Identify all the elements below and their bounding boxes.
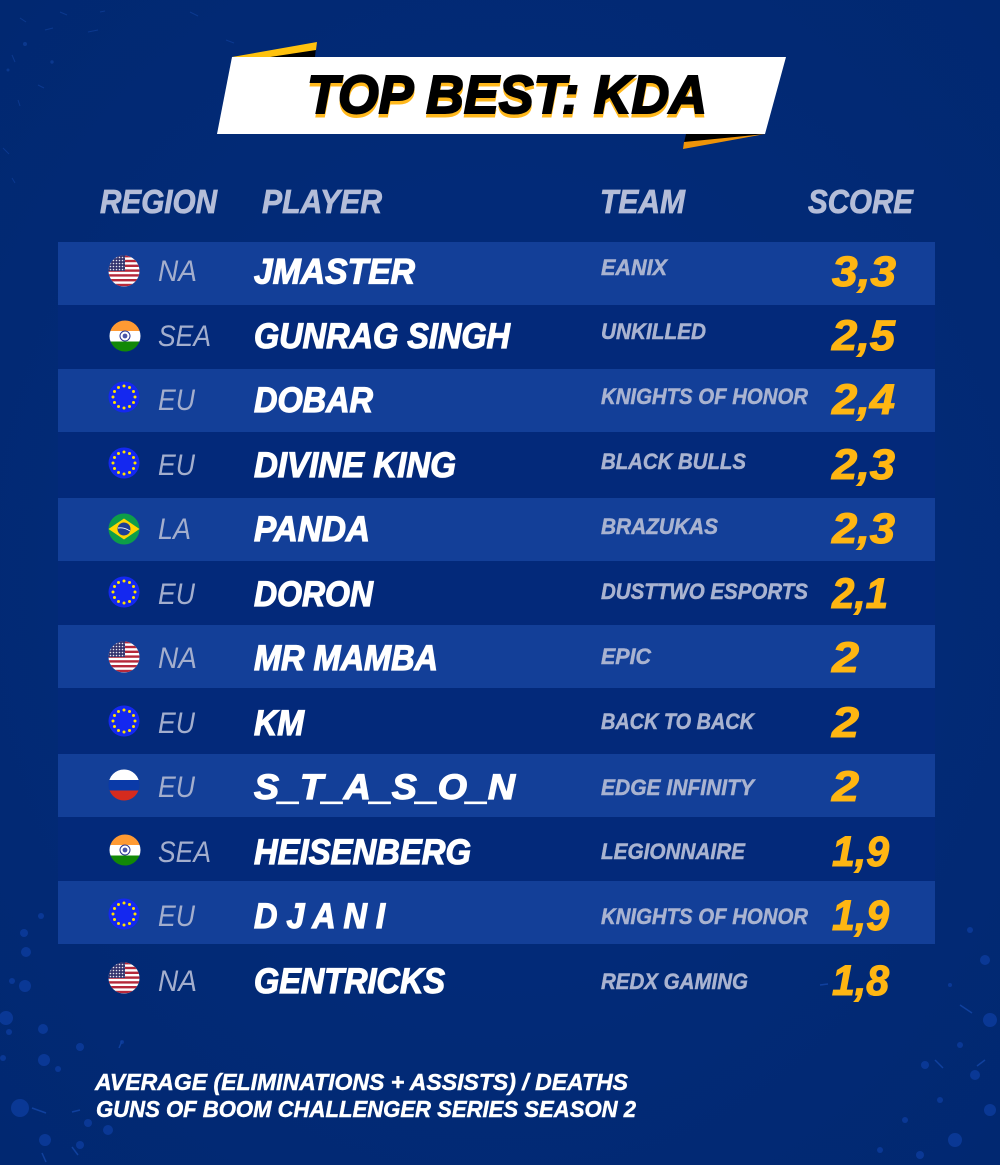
row 4: EU xyxy=(158,449,195,482)
column headers xyxy=(100,183,914,220)
footnote line 2: GUNS OF BOOM CHALLENGER SERIES SEASON 2 xyxy=(96,1096,636,1122)
row 9: EDGE INFINITY xyxy=(601,775,756,800)
row 10: LEGIONNAIRE xyxy=(601,839,746,864)
row 3: EU xyxy=(158,384,195,417)
row 2: UNKILLED xyxy=(601,319,706,344)
title shadow: TOP BEST: KDA xyxy=(307,68,707,128)
row 9: EU xyxy=(158,771,195,804)
background particles: top left xyxy=(3,11,234,183)
header: score: SCORE xyxy=(808,183,914,220)
row 5 xyxy=(58,498,935,561)
row 11: D J A N I xyxy=(254,897,386,936)
row 1: 3,3 xyxy=(832,248,896,296)
footnote line 1: AVERAGE (ELIMINATIONS + ASSISTS) / DEATHS xyxy=(94,1069,629,1095)
flag: EU xyxy=(108,448,140,478)
row 5: 2,3 xyxy=(831,505,895,553)
row 9 xyxy=(58,754,935,817)
flag: EU xyxy=(108,898,140,930)
flag: USA xyxy=(108,641,140,673)
row 3: DOBAR xyxy=(254,381,374,420)
row 6: DUSTTWO ESPORTS xyxy=(601,579,808,604)
row 7 xyxy=(58,625,935,688)
row 8 xyxy=(58,688,935,754)
background particles: bottom left xyxy=(0,913,124,1162)
flag: Russia xyxy=(108,769,140,802)
row 8: BACK TO BACK xyxy=(601,709,756,734)
row 6 xyxy=(58,561,935,625)
row 3 xyxy=(58,369,935,432)
row 2 xyxy=(58,305,935,369)
row 9: S_T_A_S_O_N xyxy=(254,768,516,807)
row 12: 1,8 xyxy=(832,957,889,1005)
row 1: NA xyxy=(158,255,197,288)
header: team: TEAM xyxy=(600,183,686,220)
flag: Brazil xyxy=(108,514,140,544)
row 5: PANDA xyxy=(254,510,370,549)
row 8: 2 xyxy=(831,699,859,747)
row 6: EU xyxy=(158,578,195,611)
row 1: EANIX xyxy=(601,255,668,280)
flag: India xyxy=(109,834,141,866)
header: region: REGION xyxy=(100,183,218,220)
row 7: NA xyxy=(158,642,197,675)
row 12: REDX GAMING xyxy=(601,969,748,994)
row 11: 1,9 xyxy=(832,892,889,940)
banner top yellow ribbon xyxy=(232,42,317,57)
row 9: 2 xyxy=(831,763,859,811)
row 5: BRAZUKAS xyxy=(601,514,718,539)
row 7: EPIC xyxy=(601,644,652,669)
row 10 xyxy=(58,817,935,881)
row 11: KNIGHTS OF HONOR xyxy=(601,904,808,929)
flag: EU xyxy=(108,382,140,412)
banner top black fold xyxy=(270,47,316,57)
row 8: EU xyxy=(158,707,195,740)
row 10: HEISENBERG xyxy=(254,833,471,872)
row 3: KNIGHTS OF HONOR xyxy=(601,384,808,409)
row 2: SEA xyxy=(158,320,211,353)
row 10: 1,9 xyxy=(832,828,889,876)
row 1 xyxy=(58,242,935,305)
flag: India xyxy=(109,320,141,352)
row 5: LA xyxy=(158,513,191,546)
row 6: 2,1 xyxy=(831,570,888,618)
row 4: 2,3 xyxy=(831,441,895,489)
title banner xyxy=(217,42,786,149)
row 7: 2 xyxy=(831,634,859,682)
flag: USA xyxy=(108,255,140,287)
header: player: PLAYER xyxy=(262,183,382,220)
row 7: MR MAMBA xyxy=(254,639,438,678)
row 2: GUNRAG SINGH xyxy=(254,317,511,356)
row 12: GENTRICKS xyxy=(254,962,445,1001)
title: TOP BEST: KDA xyxy=(307,65,707,125)
row 12 xyxy=(108,957,889,1005)
row 4: BLACK BULLS xyxy=(601,449,746,474)
row 4: DIVINE KING xyxy=(254,446,456,485)
row 3: 2,4 xyxy=(831,376,895,424)
row 10: SEA xyxy=(158,836,211,869)
flag: USA xyxy=(108,962,140,994)
background particles: bottom right xyxy=(820,927,997,1159)
leaderboard table xyxy=(58,242,935,1005)
row 11: EU xyxy=(158,900,195,933)
banner bottom orange ribbon xyxy=(683,134,765,149)
flag: EU xyxy=(108,576,140,608)
banner white plate xyxy=(217,57,786,134)
row 6: DORON xyxy=(254,575,374,614)
row 11 xyxy=(58,881,935,944)
row 1: JMASTER xyxy=(254,252,416,292)
banner bottom black fold xyxy=(684,134,765,143)
row 8: KM xyxy=(254,704,305,743)
row 4 xyxy=(58,432,935,498)
footnote xyxy=(94,1069,636,1122)
row 2: 2,5 xyxy=(831,312,896,360)
row 12: NA xyxy=(158,965,197,998)
flag: EU xyxy=(108,706,140,736)
